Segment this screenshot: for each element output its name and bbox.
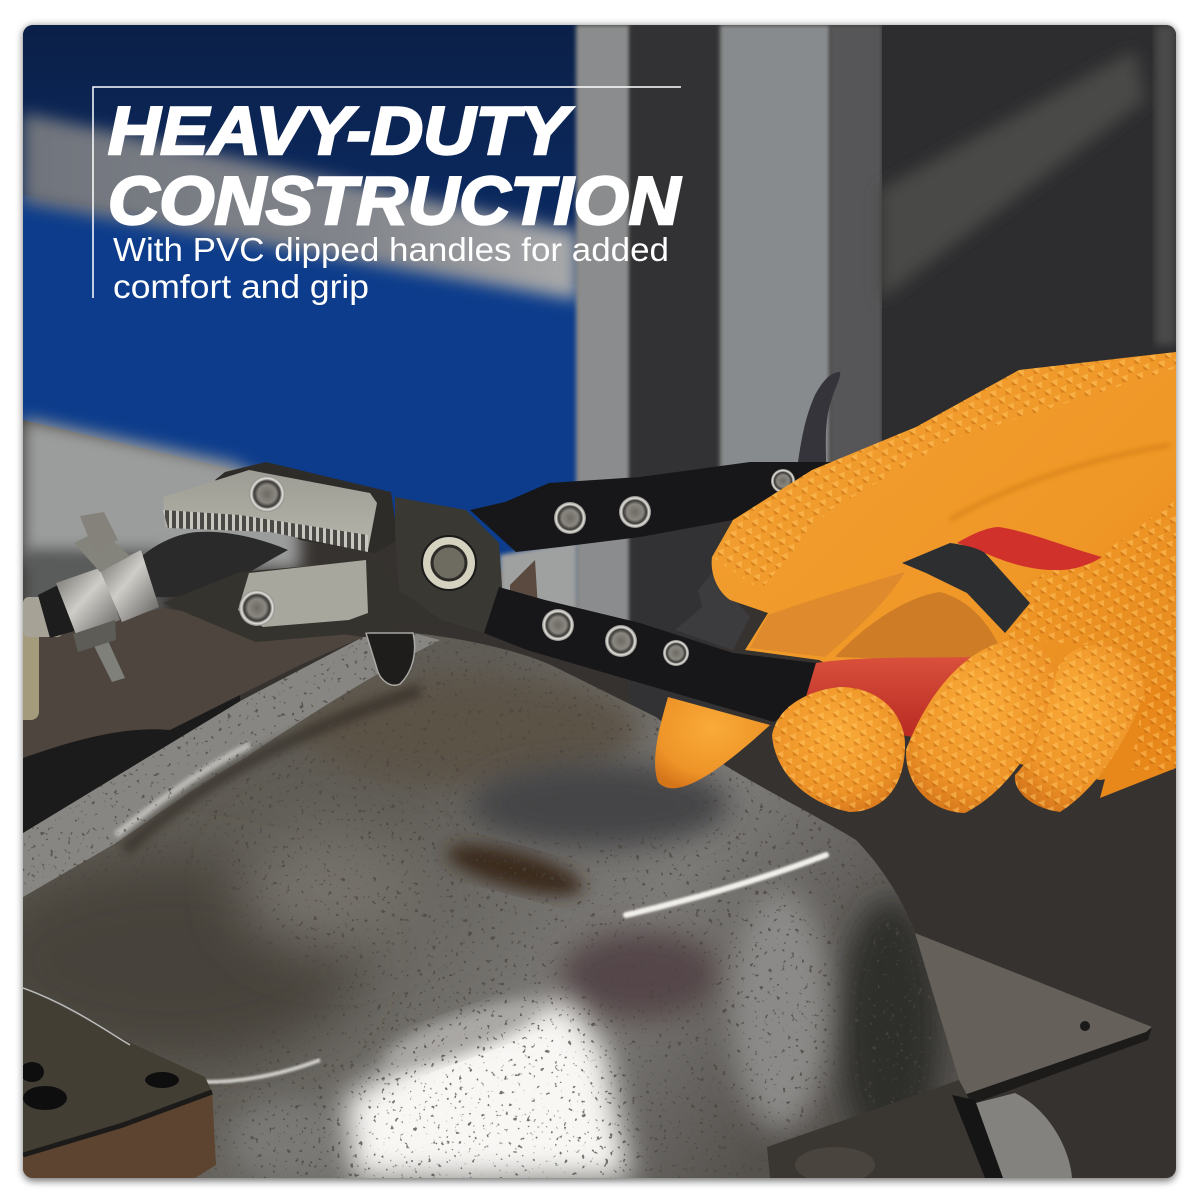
surface grit [23, 630, 968, 1178]
finger three [906, 640, 1056, 813]
glass fitting [23, 632, 39, 720]
orange gloved hand [712, 352, 1176, 813]
pliers [163, 372, 840, 722]
grip texture [640, 340, 1180, 830]
frame lines [93, 87, 681, 298]
heading line 2: CONSTRUCTION [108, 163, 682, 239]
wheel [976, 1093, 1072, 1178]
metal fender [0, 630, 968, 1180]
upper jaw teeth [163, 510, 368, 552]
radiator behind fender [23, 695, 240, 833]
bottom left bracket [20, 987, 216, 1178]
back of hand crease [950, 445, 1170, 520]
rubber hose [141, 532, 288, 597]
subtext line 1: With PVC dipped handles for added [113, 231, 669, 268]
finger four [1015, 645, 1145, 812]
subtext line 2: comfort and grip [113, 268, 369, 305]
upper jaw backing [215, 462, 398, 553]
hook [798, 372, 840, 462]
rim band [23, 633, 440, 897]
title block [93, 87, 682, 305]
finger one (under handle) [655, 697, 770, 788]
wrist fold [1100, 768, 1176, 798]
back of hand and index finger [712, 352, 1176, 780]
rusty exhaust pipe [23, 608, 363, 758]
small reflection [205, 1060, 320, 1082]
fender slot [366, 633, 415, 685]
lower jaw backing [164, 566, 370, 642]
gray tool piece behind hand [675, 573, 750, 650]
upper jaw silver face [163, 470, 377, 550]
palm interior shadow [835, 592, 1000, 662]
hose and clamp [15, 512, 288, 720]
handle rivets [239, 469, 795, 666]
pivot bolt [422, 536, 476, 590]
red grip upper [957, 527, 1102, 570]
specular highlight [626, 855, 826, 915]
black lever [902, 543, 1030, 633]
lower fender housing [767, 1080, 1003, 1183]
wrinkled thumb web [750, 572, 905, 657]
pivot body [395, 497, 502, 590]
lower jaw silver face [238, 560, 368, 627]
pipe stub [23, 597, 63, 637]
fender shading [0, 675, 940, 1180]
right side fin [915, 933, 1152, 1106]
lower handle [484, 587, 816, 722]
finger two [772, 687, 905, 812]
heading line 1: HEAVY-DUTY [108, 93, 574, 169]
upper handle [470, 462, 840, 552]
red grip lower [806, 657, 971, 737]
